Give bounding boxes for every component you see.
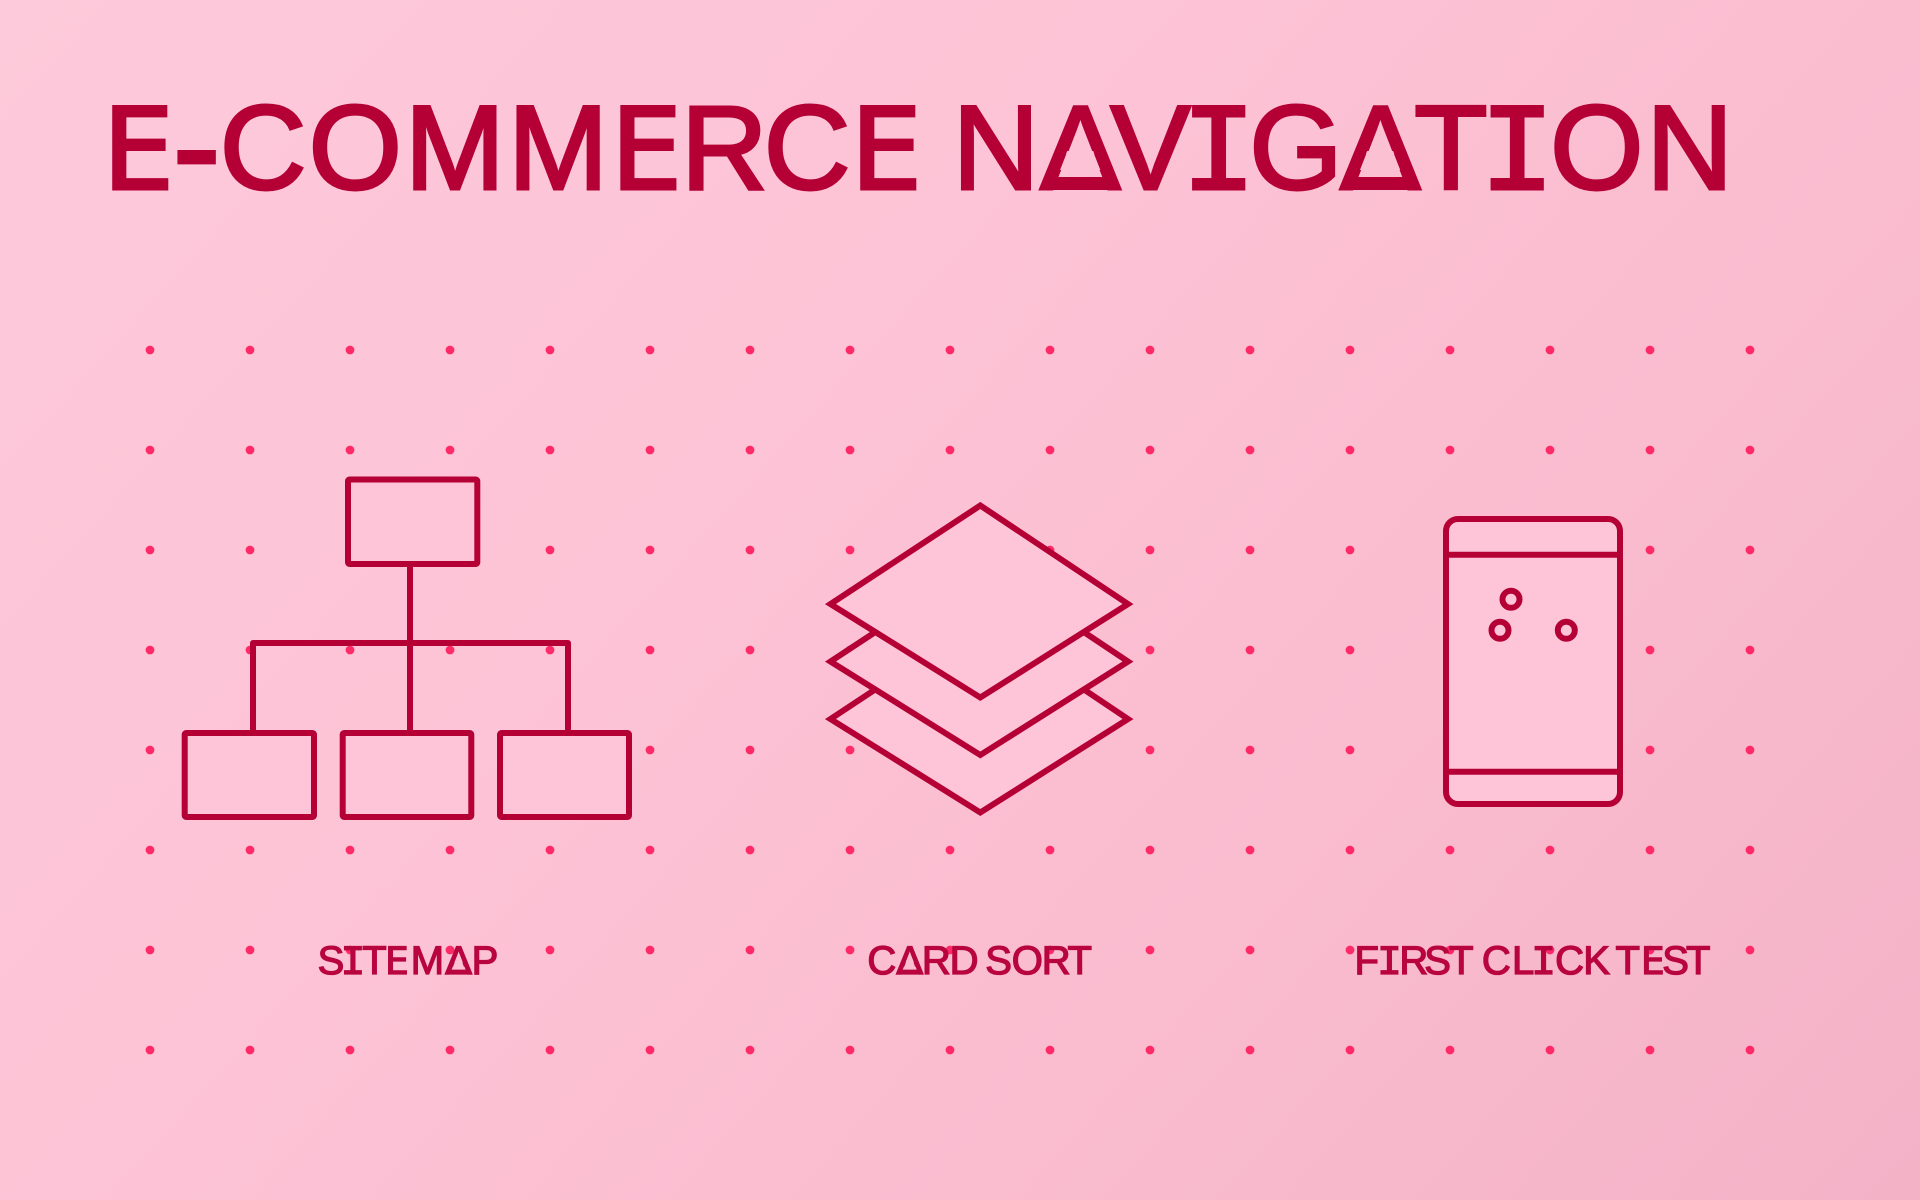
title: GAT bbox=[1249, 81, 1488, 215]
title: I bbox=[1181, 85, 1256, 227]
phone body bbox=[1446, 519, 1620, 804]
label: card sort bbox=[868, 945, 1092, 976]
label: sitemap: I bbox=[340, 940, 365, 987]
label: sitemap: E bbox=[385, 939, 409, 983]
label: sitemap: S bbox=[318, 939, 344, 983]
click point 1 bbox=[1502, 591, 1520, 608]
click point 3 bbox=[1558, 622, 1575, 639]
label: card sort: CARD SORT bbox=[867, 939, 1092, 983]
icon: card stack bbox=[830, 506, 1128, 812]
title: E bbox=[611, 84, 682, 216]
title: RC bbox=[681, 81, 850, 215]
dot grid background bbox=[100, 300, 1800, 1100]
title bbox=[112, 104, 1725, 192]
top card bbox=[830, 506, 1128, 698]
label: first click test: F bbox=[1354, 939, 1379, 983]
title: COMM bbox=[220, 81, 608, 215]
label: sitemap bbox=[318, 946, 497, 976]
middle card bbox=[830, 563, 1128, 755]
bottom card bbox=[830, 620, 1128, 812]
title: E bbox=[851, 84, 922, 216]
title: - bbox=[172, 65, 221, 227]
sitemap right box bbox=[500, 733, 629, 817]
title: NAV bbox=[946, 81, 1191, 215]
title: I bbox=[1480, 85, 1555, 227]
label: sitemap: T bbox=[362, 939, 387, 983]
title: ON bbox=[1550, 81, 1733, 215]
label: first click test: I bbox=[1377, 940, 1402, 987]
sitemap left box bbox=[185, 733, 314, 817]
title: E bbox=[103, 84, 174, 216]
sitemap top box bbox=[348, 480, 477, 564]
click point 2 bbox=[1492, 622, 1508, 639]
icon: phone with click points bbox=[1446, 519, 1620, 804]
sitemap middle box bbox=[343, 733, 471, 817]
label: first click test: RST CL bbox=[1399, 939, 1534, 983]
label: first click test: I bbox=[1531, 940, 1556, 987]
label: first click test: E bbox=[1641, 939, 1665, 983]
label: sitemap: MAP bbox=[411, 939, 498, 983]
icon: sitemap bbox=[185, 480, 629, 817]
label: first click test: ST bbox=[1662, 939, 1710, 983]
label: first click test: CK T bbox=[1555, 939, 1640, 983]
